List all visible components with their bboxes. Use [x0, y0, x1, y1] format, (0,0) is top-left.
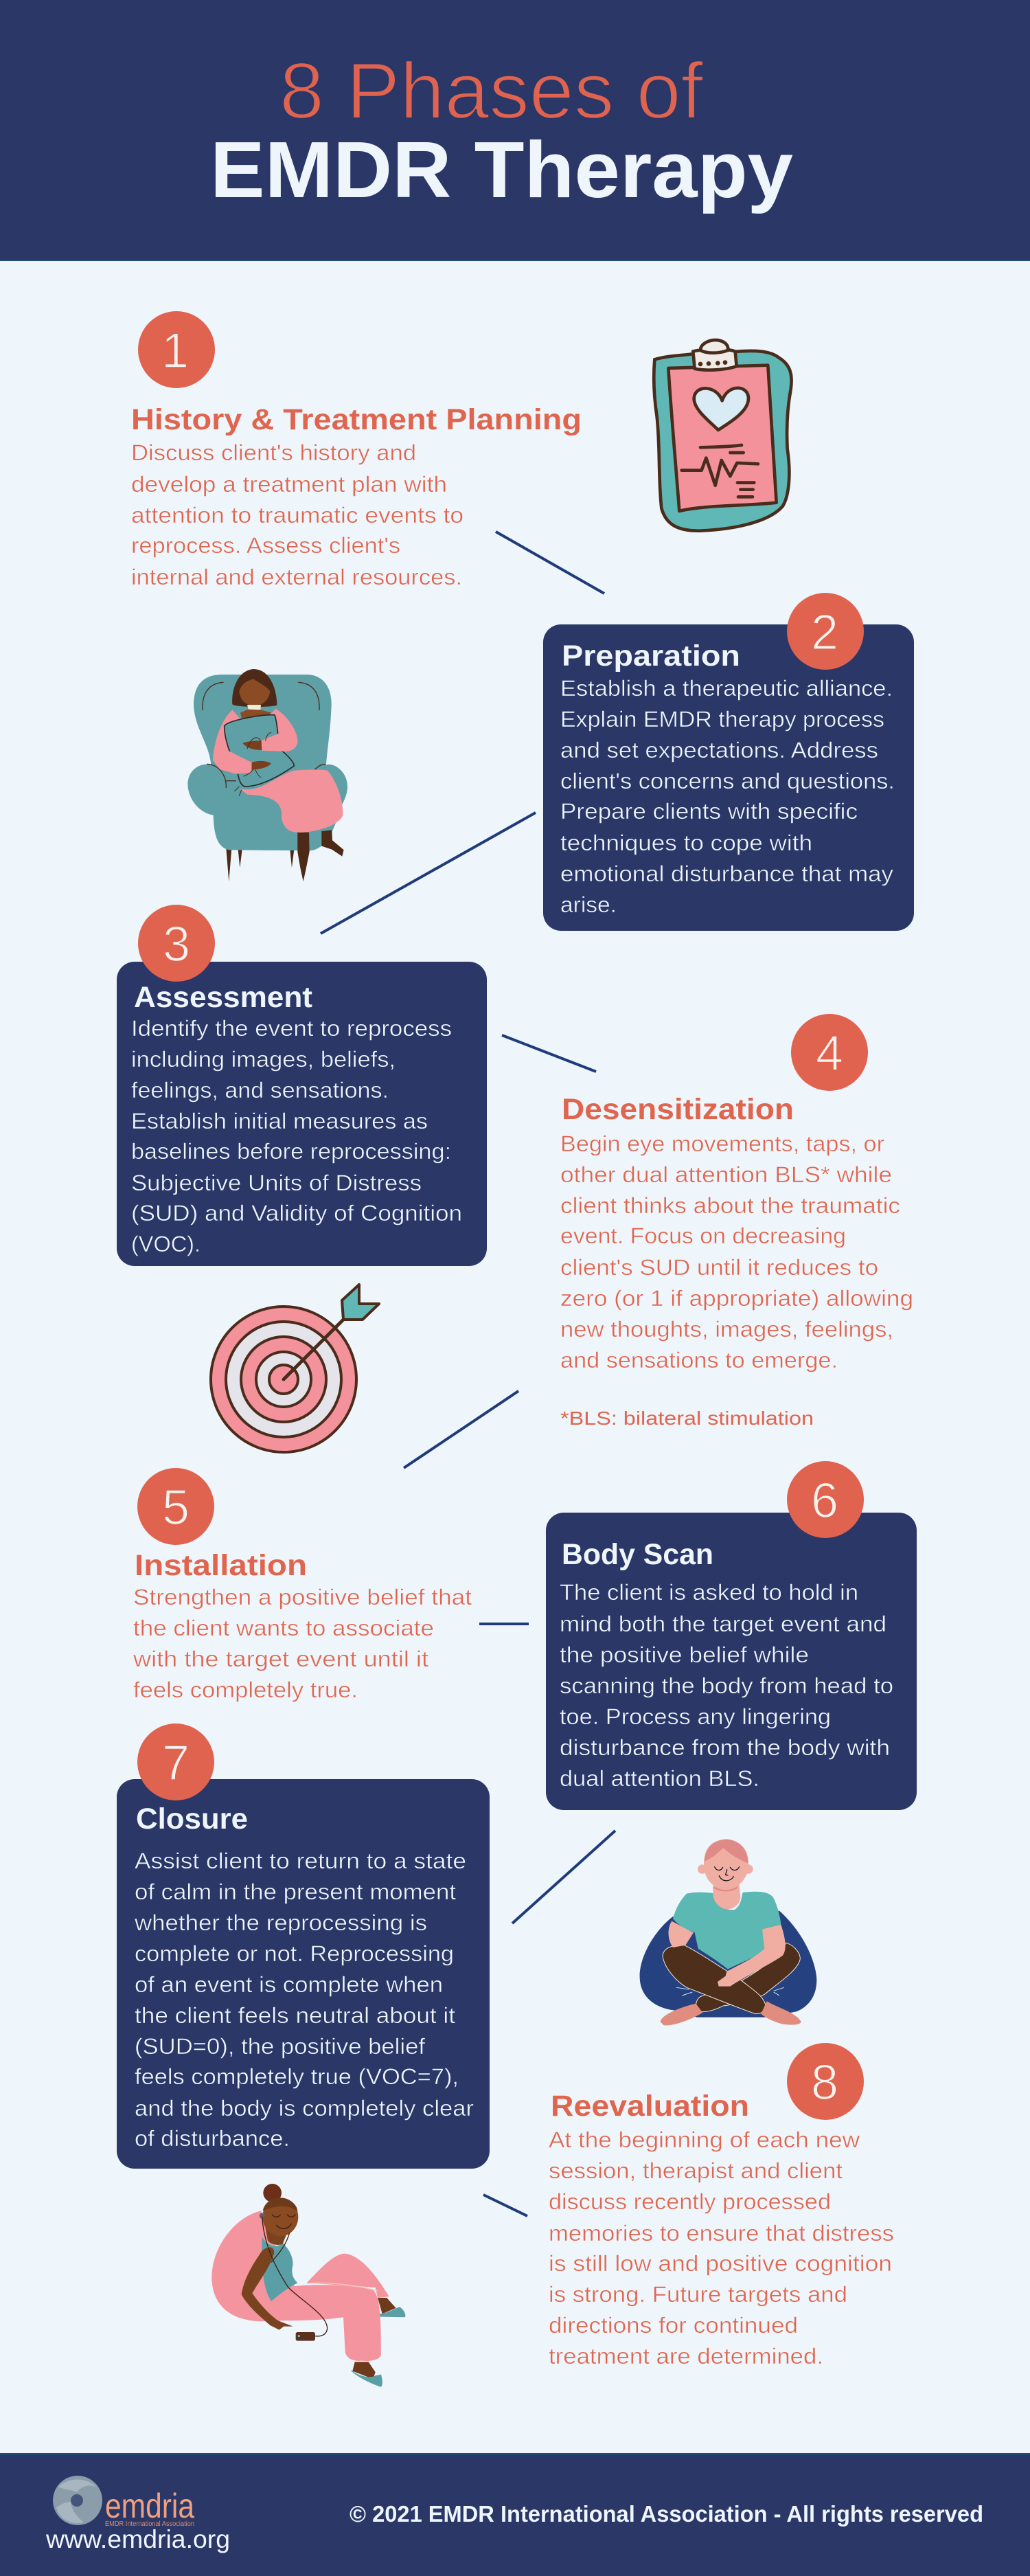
phase 6 text: toe. Process any lingering: [560, 1704, 831, 1729]
phase 3 text: Establish initial measures as: [131, 1109, 428, 1133]
phase 6 number badge: [787, 1461, 864, 1538]
arrow: phase 2 to 3 connector: [321, 813, 536, 934]
phase 5 text: [133, 1585, 472, 1702]
icon: target with arrow: [211, 1285, 379, 1452]
phase 7 text: of an event is complete when: [135, 1972, 443, 1997]
phase 1 heading: History & Treatment Planning: [131, 403, 582, 436]
phase 2 text: [560, 676, 895, 917]
phase 8 number badge: 8: [811, 2055, 838, 2110]
phase 7 text: complete or not. Reprocessing: [135, 1941, 454, 1966]
phase 7 text: the client feels neutral about it: [135, 2003, 455, 2028]
phase 5 text: Strengthen a positive belief that: [133, 1585, 472, 1609]
illustration: woman listening on beanbag: [211, 2184, 405, 2387]
title line one: 8 Phases of: [279, 46, 704, 135]
panel: body scan: [546, 1513, 917, 1810]
phase 4 text: new thoughts, images, feelings,: [560, 1317, 893, 1342]
phase 1 text: reprocess. Assess client's: [131, 533, 400, 558]
arrow: phase 5 to 6 connector: [479, 1623, 529, 1625]
header band: [0, 0, 1030, 261]
phase 1 text: internal and external resources.: [131, 565, 462, 589]
phase 7 text: feels completely true (VOC=7),: [135, 2064, 459, 2089]
phase 8 text: At the beginning of each new: [549, 2127, 860, 2152]
phase 8 text: discuss recently processed: [549, 2189, 831, 2214]
arrow: phase 1 to 2 connector: [496, 532, 604, 594]
phase 8 text: directions for continued: [549, 2313, 798, 2338]
phase 3 number badge: 3: [163, 917, 190, 972]
phase 8 heading: Reevaluation: [551, 2090, 749, 2123]
phase 6 text: dual attention BLS.: [560, 1766, 759, 1791]
phase 6 text: disturbance from the body with: [560, 1735, 890, 1760]
phase 1 text: attention to traumatic events to: [131, 503, 464, 528]
copyright line: © 2021 EMDR International Association - All rights reserved: [350, 2501, 983, 2527]
phase 1 text: Discuss client's history and: [131, 440, 416, 465]
phase 8 text: session, therapist and client: [549, 2158, 843, 2183]
panel: assessment: [117, 962, 487, 1266]
phase 5 text: with the target event until it: [133, 1647, 428, 1671]
title line two: EMDR Therapy: [210, 125, 793, 214]
phase 3 text: feelings, and sensations.: [131, 1078, 389, 1103]
phase 5 text: feels completely true.: [133, 1677, 358, 1702]
phase 1 text: develop a treatment plan with: [131, 472, 447, 497]
phase 4 text: event. Focus on decreasing: [560, 1223, 846, 1248]
logo: emdria: EMDR International Association: [105, 2520, 194, 2528]
phase 6 text: scanning the body from head to: [560, 1673, 893, 1698]
phase 8 text: is still low and positive cognition: [549, 2251, 892, 2276]
phase 7 heading: Closure: [136, 1803, 248, 1835]
phase 5 number badge: 5: [162, 1480, 190, 1535]
phase 1 text: [131, 440, 464, 589]
phase 2 text: Establish a therapeutic alliance.: [560, 676, 893, 701]
phase 6 text: [560, 1580, 893, 1791]
phase 2 text: Explain EMDR therapy process: [560, 707, 884, 732]
phase 4 text: and sensations to emerge.: [560, 1348, 838, 1372]
phase 6 heading: Body Scan: [562, 1538, 713, 1571]
phase 3 text: [131, 1016, 462, 1256]
phase 3 text: (SUD) and Validity of Cognition: [131, 1201, 462, 1225]
phase 7 number badge: [137, 1724, 214, 1800]
phase 1 number badge: [138, 311, 215, 388]
phase 4 text: [560, 1131, 913, 1372]
phase 3 text: baselines before reprocessing:: [131, 1139, 451, 1164]
phase 8 text: is strong. Future targets and: [549, 2282, 847, 2307]
phase 5 text: the client wants to associate: [133, 1616, 434, 1640]
phase 7 number badge: 7: [162, 1736, 190, 1791]
website address: www.emdria.org: [45, 2525, 230, 2553]
phase 8 number badge: [787, 2043, 864, 2120]
phase 7 text: Assist client to return to a state: [135, 1849, 466, 1873]
panel: preparation: [543, 624, 914, 931]
phase 8 text: memories to ensure that distress: [549, 2221, 894, 2246]
arrow: phase 6 to 7 connector: [512, 1831, 615, 1923]
phase 4 text: other dual attention BLS* while: [560, 1162, 892, 1187]
phase 3 heading: Assessment: [134, 981, 312, 1014]
phase 7 text: of disturbance.: [135, 2126, 290, 2151]
phase 4 number badge: 4: [816, 1026, 843, 1081]
phase 7 text: of calm in the present moment: [135, 1879, 456, 1904]
phase 7 text: and the body is completely clear: [135, 2096, 474, 2121]
phase 3 number badge: [138, 905, 215, 982]
phase 3 text: Subjective Units of Distress: [131, 1171, 422, 1195]
phase 2 number badge: 2: [811, 605, 838, 660]
phase 7 text: whether the reprocessing is: [134, 1910, 427, 1935]
phase 5 number badge: [137, 1468, 214, 1545]
phase 2 text: arise.: [560, 892, 617, 917]
illustration: man meditating on beanbag: [640, 1839, 816, 2025]
arrow: phase 4 to 5 connector: [404, 1391, 518, 1468]
phase 4 heading: Desensitization: [562, 1093, 794, 1126]
logo: emdria: emdria: [105, 2487, 194, 2525]
phase 3 text: Identify the event to reprocess: [131, 1016, 452, 1041]
phase 2 text: client's concerns and questions.: [560, 769, 895, 793]
phase 5 heading: Installation: [135, 1549, 307, 1582]
footer band: [0, 2453, 1030, 2576]
icon: medical clipboard with heart: [654, 340, 792, 531]
illustration: woman hugging pillow in armchair: [187, 669, 347, 881]
phase 2 text: techniques to cope with: [560, 831, 812, 855]
arrow: phase 7 to 8 connector: [483, 2195, 527, 2216]
phase 4 text: client's SUD until it reduces to: [560, 1255, 878, 1280]
phase 1 number badge: 1: [161, 324, 189, 379]
phase 2 text: Prepare clients with specific: [560, 799, 858, 824]
phase 7 text: (SUD=0), the positive belief: [135, 2034, 425, 2059]
phase 4 number badge: [791, 1014, 868, 1091]
phase 6 text: mind both the target event and: [560, 1612, 886, 1636]
phase 8 text: treatment are determined.: [549, 2344, 823, 2369]
phase 7 text: [134, 1849, 474, 2151]
phase 2 heading: Preparation: [562, 640, 740, 673]
phase 6 number badge: 6: [811, 1473, 838, 1528]
panel: closure: [117, 1779, 490, 2169]
phase 6 text: the positive belief while: [560, 1642, 809, 1667]
phase 4 text: client thinks about the traumatic: [560, 1193, 900, 1218]
phase 3 text: (VOC).: [131, 1232, 201, 1256]
footnote: BLS: *BLS: bilateral stimulation: [560, 1408, 814, 1429]
phase 4 text: Begin eye movements, taps, or: [560, 1131, 884, 1156]
phase 6 text: The client is asked to hold in: [560, 1580, 858, 1605]
phase 3 text: including images, beliefs,: [131, 1047, 396, 1072]
phase 2 text: emotional disturbance that may: [560, 861, 893, 886]
phase 2 text: and set expectations. Address: [560, 738, 878, 762]
phase 2 number badge: [787, 593, 864, 670]
logo: emdria: [53, 2476, 194, 2528]
arrow: phase 3 to 4 connector: [502, 1035, 596, 1072]
phase 8 text: [549, 2127, 894, 2369]
phase 4 text: zero (or 1 if appropriate) allowing: [560, 1286, 913, 1311]
